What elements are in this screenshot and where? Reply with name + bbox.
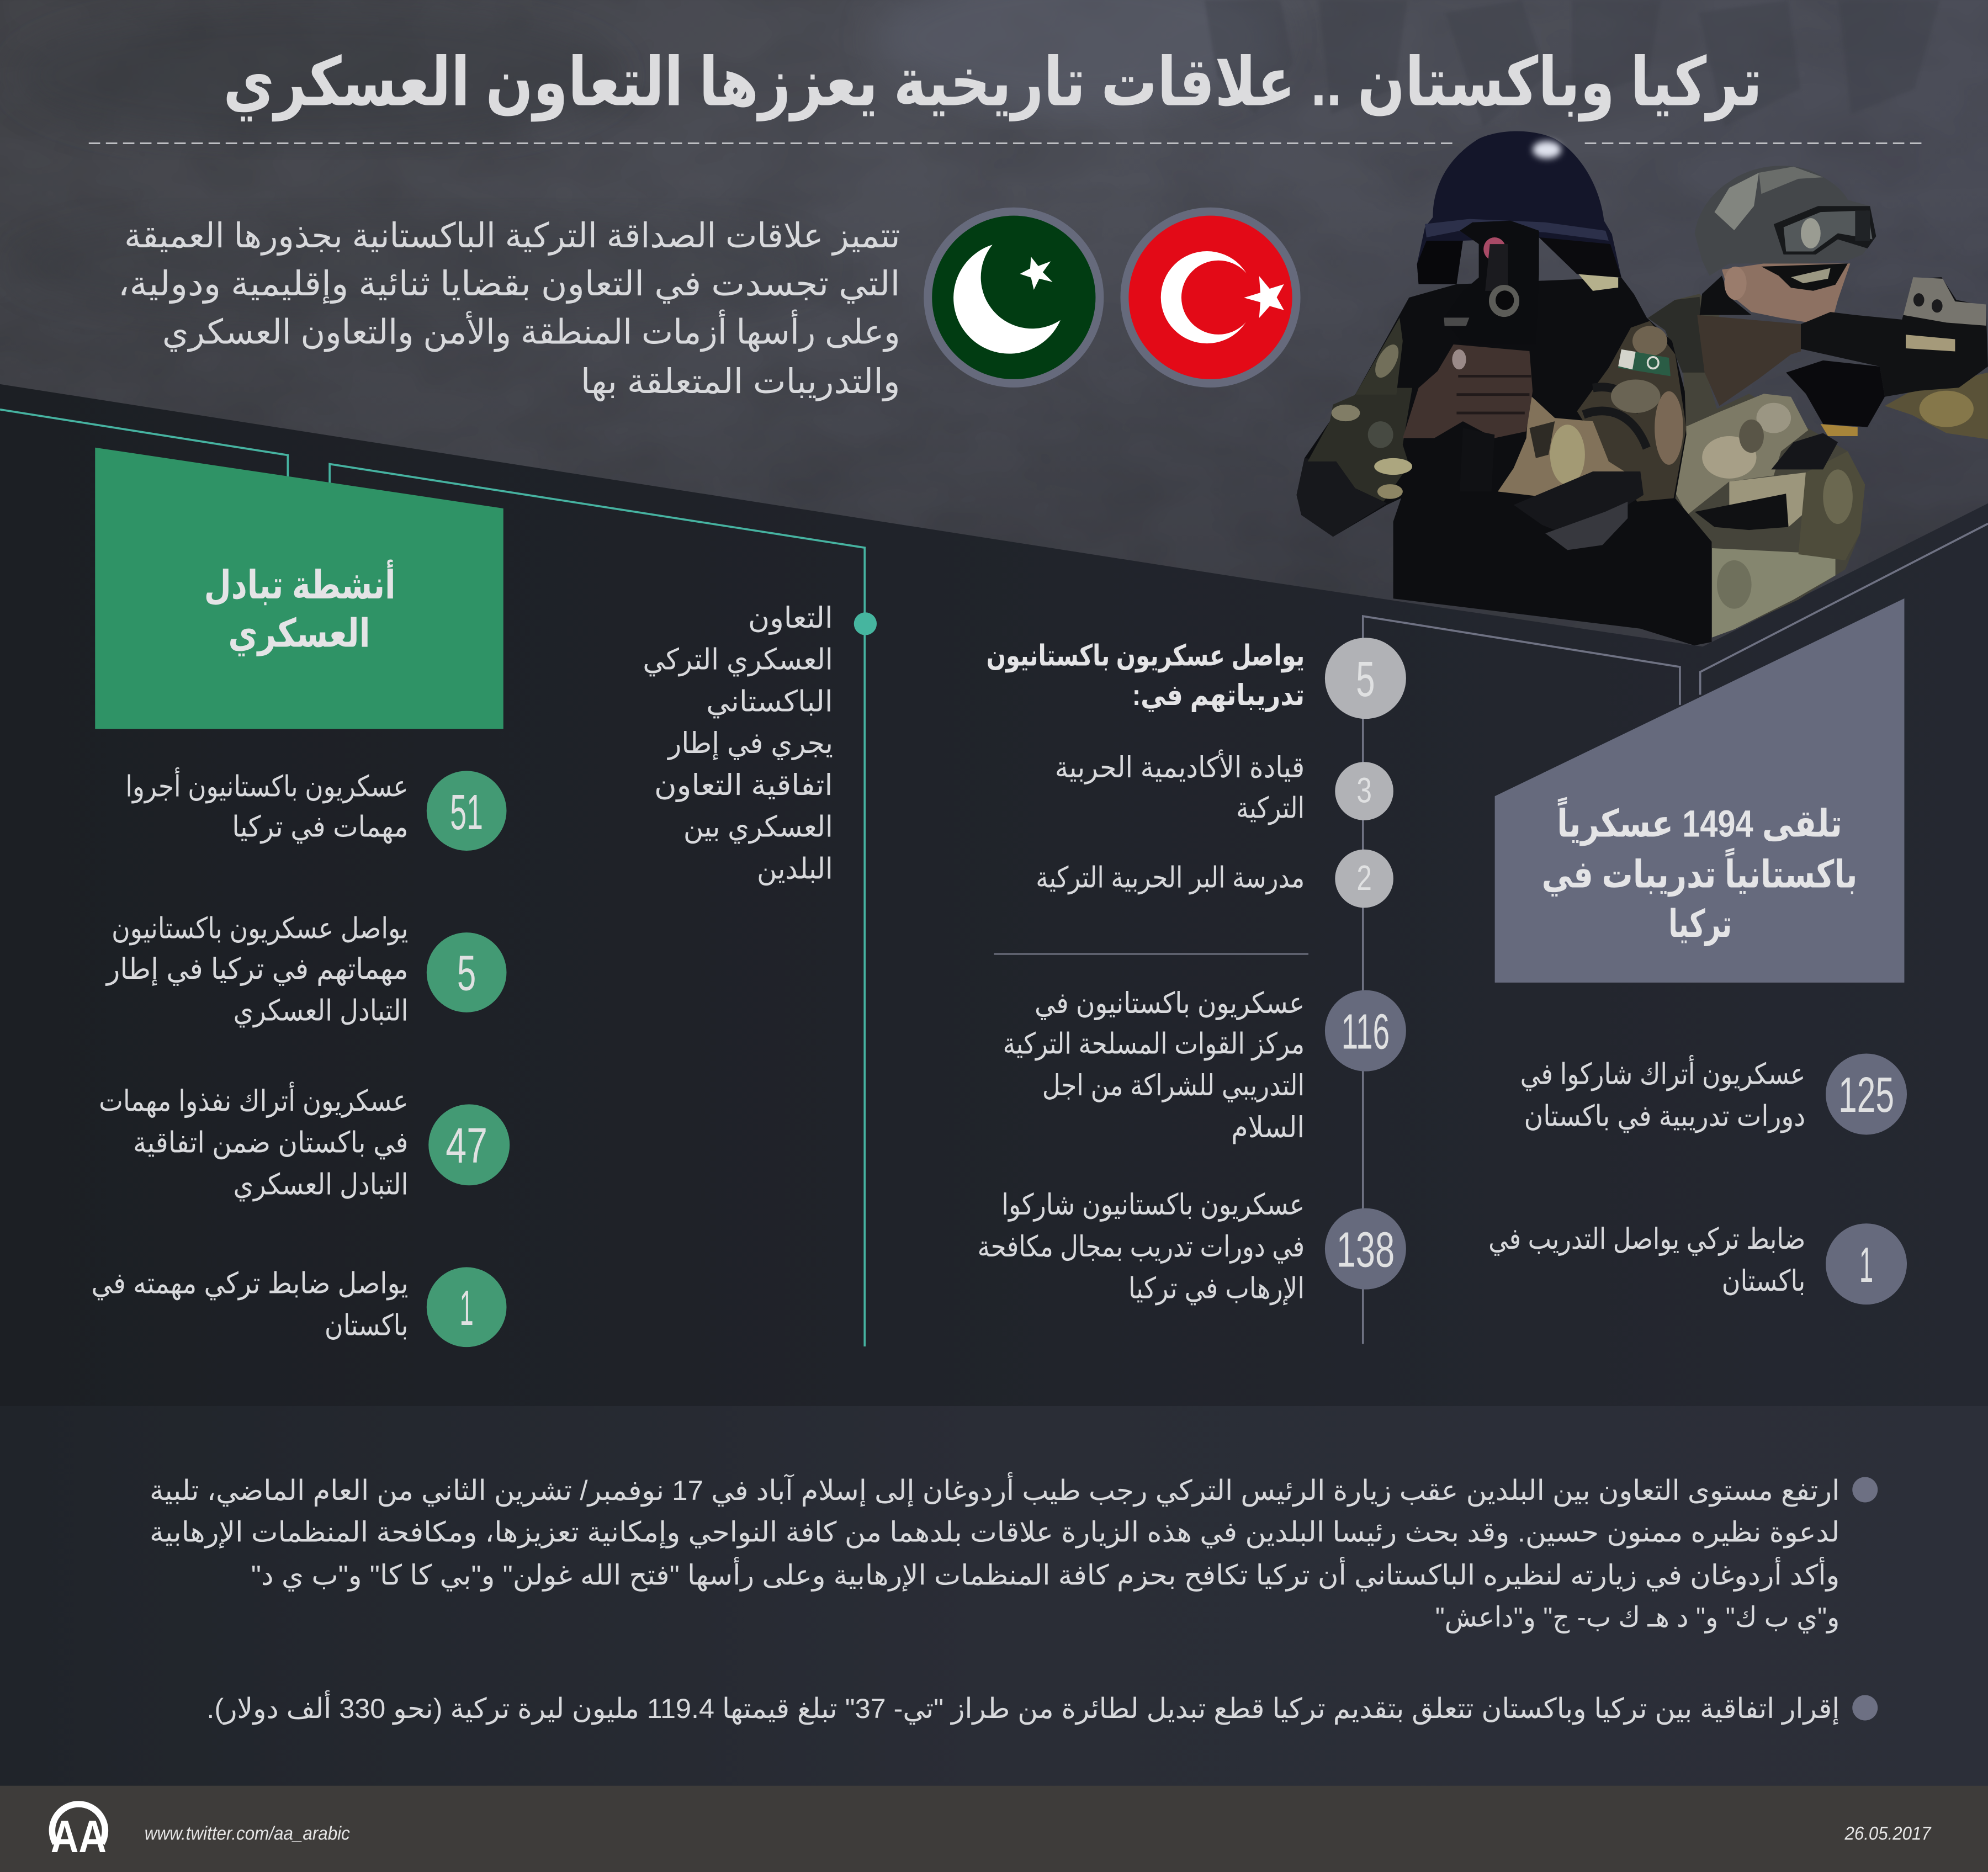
soldier in front: [1297, 131, 1711, 645]
list: Turkish officer stat 1: باكستان: [1722, 1265, 1805, 1297]
list: exchange stat 1: [91, 1267, 506, 1347]
list: exchange stat 1: 1: [460, 1280, 474, 1335]
timeline dot: [854, 612, 877, 635]
list: exchange stat 51: مهمات في تركيا: [232, 811, 408, 844]
logo: Anadolu Agency: AA: [51, 1811, 107, 1862]
text block: exchange description: العسكري بين: [683, 811, 833, 844]
text block: exchange description: التعاون: [748, 602, 833, 635]
panel: military exchange heading: أنشطة تبادل: [204, 559, 396, 607]
list: training stat 5: 5: [1356, 651, 1375, 707]
list: Turkish officer stat 1: 1: [1859, 1237, 1873, 1292]
list: exchange stat 5: التبادل العسكري: [234, 995, 408, 1028]
text block: first note: [150, 1472, 1839, 1634]
list: training sub-stat 3: 3: [1356, 771, 1372, 810]
list: training stat 116: مركز القوات المسلحة التركية: [1003, 1027, 1305, 1060]
text block: exchange description: [643, 602, 833, 886]
list: exchange stat 47: التبادل العسكري: [234, 1168, 408, 1201]
text block: exchange description: اتفاقية التعاون: [654, 769, 833, 802]
list: training sub-stat 2: 2: [1356, 858, 1372, 898]
list: exchange stat 51: 51: [450, 784, 483, 840]
list: training stat 116: عسكريون باكستانيون في: [1035, 987, 1305, 1020]
list: exchange stat 5: 5: [457, 946, 476, 1001]
list: exchange stat 47: 47: [446, 1118, 487, 1173]
text block: first note: وأكد أردوغان في زيارته لنظيره الباكستاني أن تركيا تكافح بحزم كافة المنظمات الإرهابية وعلى رأسها "فتح الله غولن" و"بي كا كا" و"ب ي د": [251, 1557, 1839, 1592]
panel: 1494 trainees heading: [1495, 598, 1904, 983]
panel: military exchange heading: [95, 448, 503, 729]
list: Turkish trainees stat 125: دورات تدريبية في باكستان: [1524, 1100, 1805, 1133]
list: training stat 138: عسكريون باكستانيون شاركوا: [1001, 1189, 1305, 1222]
text block: second note: إقرار اتفاقية بين تركيا وباكستان تتعلق بتقديم تركيا قطع تبديل لطائرة من طراز "تي- 37" تبلغ قيمتها 119.4 مليون ليرة تركية (نحو 330 ألف دولار).: [206, 1690, 1839, 1725]
background: upper grey wall: [0, 0, 1988, 812]
list: training stat 138: 138: [1337, 1222, 1395, 1277]
list: exchange stat 51: عسكريون باكستانيون أجروا: [125, 767, 408, 803]
list: exchange stat 47: [99, 1081, 510, 1201]
list: training sub-stat 3: التركية: [1236, 792, 1305, 825]
list: exchange stat 47: عسكريون أتراك نفذوا مهمات: [99, 1081, 408, 1118]
list: training sub-stat 3: [1055, 749, 1393, 825]
list: training stat 116: [1003, 987, 1406, 1144]
background: dark lower angled panel: [0, 384, 1988, 1406]
list: Turkish trainees stat 125: [1520, 1053, 1907, 1134]
list: exchange stat 5: يواصل عسكريون باكستانيون: [112, 912, 408, 945]
panel: 1494 trainees heading: تلقى 1494 عسكرياً: [1557, 797, 1842, 846]
intro paragraph: وعلى رأسها أزمات المنطقة والأمن والتعاون العسكري: [162, 309, 900, 352]
text block: first note: و"ي ب ك" و" د هـ ك ب- ج" و"داعش": [1435, 1601, 1839, 1634]
list: exchange stat 47: في باكستان ضمن اتفاقية: [133, 1127, 408, 1160]
text block: exchange description: يجري في إطار: [666, 727, 833, 760]
list: training stat 116: السلام: [1231, 1111, 1305, 1144]
photo: two soldiers: [1297, 131, 1988, 645]
text block: first note: لدعوة نظيره ممنون حسين. وقد بحث رئيسا البلدين في هذه الزيارة علاقات بلدهما من كافة النواحي وإمكانية تعزيزها، ومكافحة المنظمات الإرهابية: [150, 1516, 1839, 1549]
list: training stat 5: يواصل عسكريون باكستانيون: [987, 640, 1305, 673]
grey connector lines: [1363, 523, 1988, 1344]
list: exchange stat 1: يواصل ضابط تركي مهمته في: [91, 1268, 408, 1301]
list: training stat 116: 116: [1342, 1004, 1390, 1059]
list: training sub-stat 3: قيادة الأكاديمية الحربية: [1055, 749, 1305, 784]
list: training stat 5: تدريباتهم في:: [1132, 679, 1305, 712]
soldier behind: [1648, 166, 1988, 638]
footer date: 26.05.2017: [1844, 1823, 1932, 1844]
list: training stat 138: [978, 1189, 1406, 1306]
bullet: second note: [1852, 1695, 1878, 1720]
title dashed divider: [89, 143, 1925, 144]
panel: military exchange heading: العسكري: [228, 612, 370, 656]
list: training stat 5: [987, 638, 1406, 719]
panel: 1494 trainees heading: باكستانياً تدريبات في: [1542, 847, 1857, 897]
list: exchange stat 5: [105, 912, 506, 1028]
panel: 1494 trainees heading: تركيا: [1668, 903, 1732, 946]
list: training stat 116: التدريبي للشراكة من اجل: [1042, 1069, 1305, 1102]
list: Turkish officer stat 1: ضابط تركي يواصل التدريب في: [1488, 1223, 1805, 1256]
footer bar: [0, 1786, 1988, 1872]
list: Turkish officer stat 1: [1488, 1223, 1907, 1304]
list: training stat 138: الإرهاب في تركيا: [1128, 1272, 1305, 1306]
list: training sub-stat 2: [1036, 850, 1393, 908]
icon: Turkey flag: [1120, 208, 1301, 388]
icon: Pakistan flag: [924, 208, 1104, 388]
text block: exchange description: البلدين: [757, 853, 833, 886]
teal connector lines: [0, 410, 865, 1346]
list: exchange stat 1: باكستان: [325, 1309, 408, 1341]
list: training stat 138: في دورات تدريب بمجال مكافحة: [978, 1231, 1305, 1264]
list: training sub-stat 2: مدرسة البر الحربية التركية: [1036, 862, 1305, 895]
list: exchange stat 5: مهماتهم في تركيا في إطار: [105, 953, 408, 986]
intro paragraph: والتدريبات المتعلقة بها: [581, 363, 900, 402]
list: Turkish trainees stat 125: عسكريون أتراك شاركوا في: [1520, 1055, 1805, 1091]
intro paragraph: [118, 217, 900, 402]
bullet: first note: [1852, 1477, 1878, 1502]
text block: exchange description: العسكري التركي: [643, 644, 833, 677]
list: exchange stat 51: [125, 767, 506, 851]
text block: first note: ارتفع مستوى التعاون بين البلدين عقب زيارة الرئيس التركي رجب طيب أردوغان إلى إسلام آباد في 17 نوفمبر/ تشرين الثاني من العام الماضي، تلبية: [150, 1472, 1839, 1507]
list: Turkish trainees stat 125: 125: [1838, 1067, 1894, 1122]
intro paragraph: التي تجسدت في التعاون بقضايا ثنائية وإقليمية ودولية،: [118, 265, 900, 304]
footer link: www.twitter.com/aa_arabic: [145, 1823, 350, 1844]
intro paragraph: تتميز علاقات الصداقة التركية الباكستانية بجذورها العميقة: [124, 217, 900, 256]
panel: background notes band: [0, 1406, 1988, 1786]
text block: exchange description: الباكستاني: [706, 685, 833, 718]
